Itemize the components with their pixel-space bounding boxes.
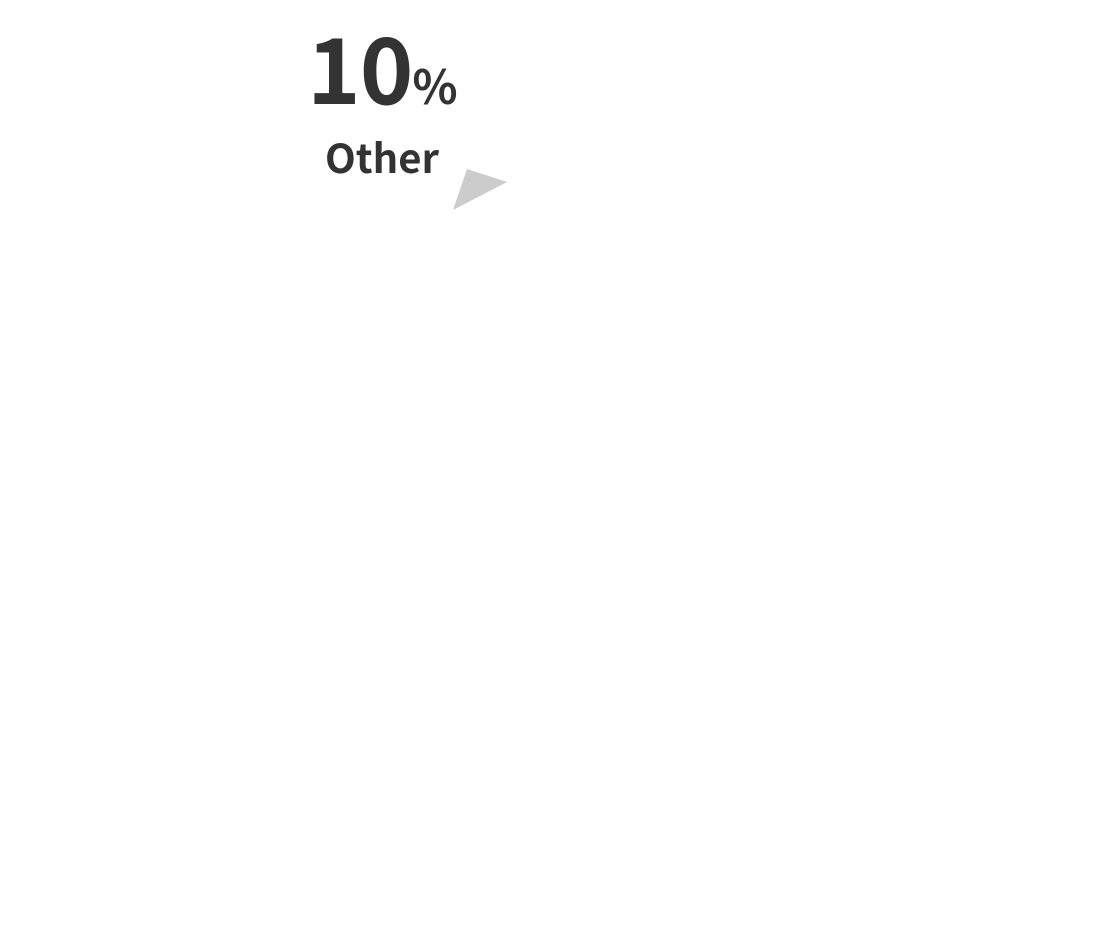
category label: Other xyxy=(325,127,439,185)
percentage value: 10% xyxy=(307,0,457,131)
callout: 10% other xyxy=(307,0,507,210)
arrow pointer xyxy=(453,169,507,210)
